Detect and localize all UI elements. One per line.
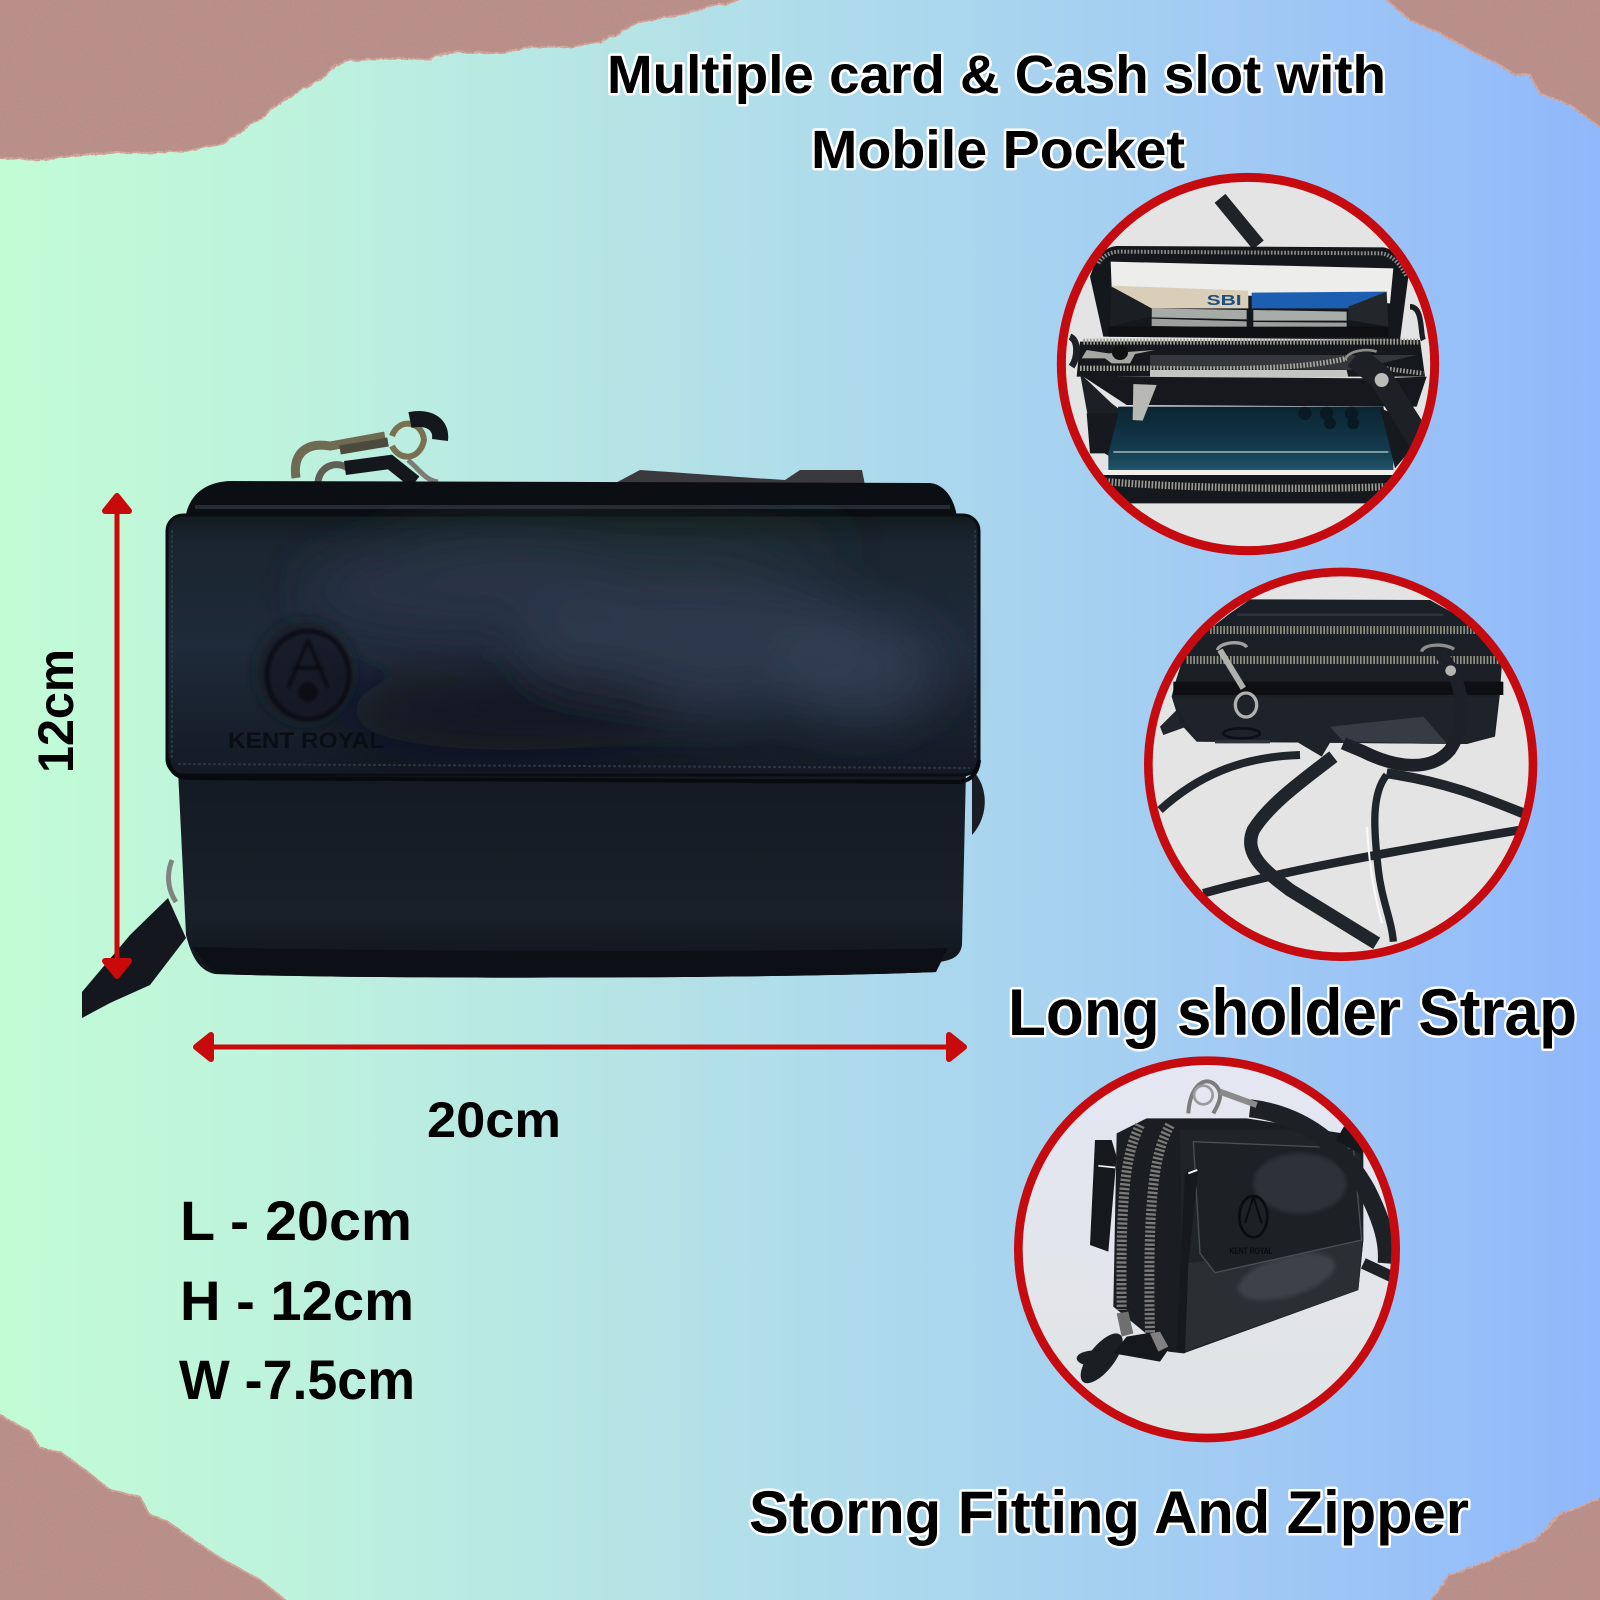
- torn paper: bottom left: [0, 1405, 295, 1600]
- dimensions list: L - 20cm: [180, 1189, 412, 1252]
- label: 20cm width: 20cm: [427, 1092, 561, 1148]
- front flap: [167, 515, 979, 775]
- heading: long shoulder strap: Long sholder Strap: [1008, 975, 1577, 1049]
- flap leather highlights: [300, 528, 940, 750]
- arrow: height dimension: [105, 496, 129, 976]
- torn paper: top left: [0, 0, 760, 160]
- label: 12cm height: 12cm: [28, 649, 84, 773]
- heading: strong fitting and zipper: Storng Fitting And Zipper: [749, 1479, 1469, 1546]
- circle photo: fittings and zipper: KENT ROYAL: [1229, 1246, 1273, 1256]
- torn paper: top right: [1387, 0, 1600, 135]
- hardware: clasp and strap loop on top: [295, 419, 440, 482]
- dimensions list: [179, 1189, 415, 1411]
- heading: multiple card and cash slot: [607, 45, 1386, 180]
- main photo: black leather wallet bag: [82, 419, 985, 1018]
- arrow: width dimension: [196, 1035, 964, 1059]
- flap stitching: [172, 530, 975, 768]
- red ring: [1061, 177, 1435, 551]
- red ring: [1018, 1061, 1396, 1438]
- circle photo: inside pockets with cards and phone: [1056, 172, 1440, 556]
- heading: multiple card and cash slot: Multiple card & Cash slot with: [607, 45, 1386, 105]
- lower body: [178, 770, 966, 978]
- dimensions list: W -7.5cm: [179, 1348, 415, 1411]
- circle photo: inside pockets with cards and phone: SBI: [1207, 293, 1242, 309]
- circle photo: fittings and zipper: [1014, 1056, 1400, 1442]
- red ring: [1148, 572, 1533, 957]
- zipper pulls lower left: [82, 860, 186, 1018]
- zipper band: [185, 481, 958, 560]
- heading: multiple card and cash slot: Mobile Pocket: [811, 120, 1185, 180]
- torn paper: bottom right: [1420, 1490, 1600, 1600]
- embossed logo emblem: [255, 620, 355, 724]
- embossed brand name: KENT ROYAL: [228, 728, 384, 753]
- circle photo: long shoulder strap: [1144, 568, 1538, 961]
- strap fold behind bag: [606, 470, 866, 490]
- dimensions list: H - 12cm: [180, 1269, 414, 1332]
- right strap: [972, 770, 985, 835]
